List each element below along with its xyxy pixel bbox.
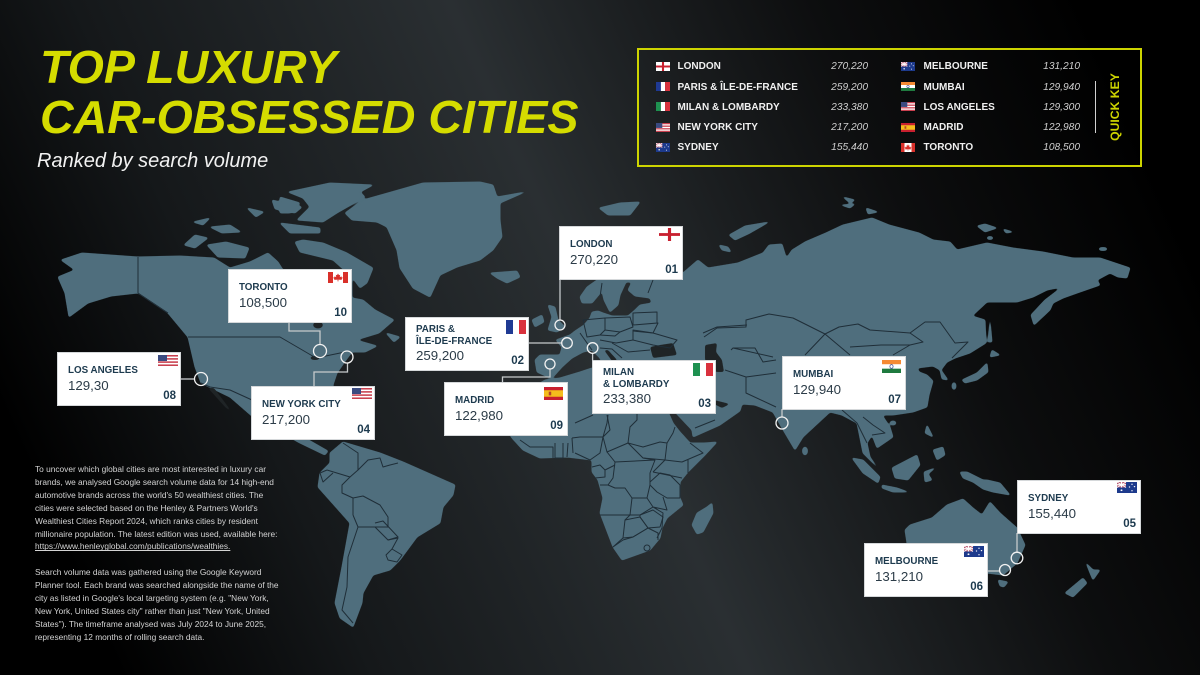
quick key rows: 122,980 — [1043, 122, 1080, 133]
card: Melbourne: 06 — [970, 581, 983, 593]
quick key rows: MUMBAI — [924, 82, 965, 92]
North America — [58, 253, 394, 455]
card: New York City: 217,200 — [262, 412, 310, 427]
panel: quick key — [637, 48, 1142, 167]
card: Los Angeles: 08 — [163, 390, 176, 402]
Africa — [500, 368, 717, 560]
card: Madrid: 122,980 — [455, 408, 503, 423]
Greenland — [345, 182, 525, 297]
Arctic islands of Canada — [184, 183, 400, 342]
Iceland — [490, 271, 520, 283]
card: Paris: 259,200 — [416, 348, 464, 363]
card: New York City: 04 — [357, 424, 370, 436]
card: Milan: 03 — [698, 398, 711, 410]
card: Mumbai — [782, 356, 906, 410]
card: London: 01 — [665, 264, 678, 276]
methodology text: cities were selected based on the Henley & Partners World's — [35, 503, 258, 513]
methodology text — [35, 464, 279, 642]
methodology text: States"). The timeframe analysed was July 2024 to June 2025, — [35, 619, 266, 629]
card: New York City — [251, 386, 375, 440]
card: London — [559, 226, 683, 280]
inland seas — [208, 322, 730, 412]
landmasses — [58, 182, 1130, 627]
methodology text: representing 12 months of rolling search data. — [35, 632, 204, 642]
methodology text: Search volume data was gathered using the Google Keyword — [35, 567, 261, 577]
Madagascar — [692, 503, 713, 534]
quick key rows: QUICK KEY — [1108, 73, 1122, 141]
methodology text: Planner tool. Each brand was searched alongside the name of the — [35, 580, 279, 590]
card: Sydney — [1017, 480, 1141, 534]
quick key rows: NEW YORK CITY — [678, 122, 758, 133]
methodology text: automotive brands across the world's 50 wealthiest cities. The — [35, 490, 263, 500]
card: Milan — [592, 360, 716, 414]
card: Toronto: 10 — [334, 307, 347, 319]
card: Toronto: TORONTO — [239, 282, 288, 293]
card: Milan: & LOMBARDY — [603, 379, 669, 390]
card: Milan: 233,380 — [603, 391, 651, 406]
quick key rows: MELBOURNE — [924, 61, 988, 72]
quick key rows: 129,940 — [1043, 82, 1080, 92]
methodology text: To uncover which global cities are most interested in luxury car — [35, 464, 266, 474]
methodology text: https://www.henleyglobal.com/publications/wealthies. — [35, 541, 230, 551]
card: Los Angeles: 129,30 — [68, 378, 109, 393]
Arctic islands of Eurasia — [599, 197, 1107, 252]
quick key rows — [656, 61, 1122, 153]
card: Toronto: 108,500 — [239, 295, 287, 310]
card: Sydney: 155,440 — [1028, 506, 1076, 521]
methodology text: Wealthiest Cities Report 2024, which ranks cities by resident — [35, 516, 258, 526]
quick key rows: 131,210 — [1043, 61, 1080, 72]
card: Toronto — [228, 269, 352, 323]
quick key rows: LOS ANGELES — [924, 102, 995, 113]
subtitle: Ranked by search volume — [37, 150, 268, 172]
card: Madrid — [444, 382, 568, 436]
title — [40, 41, 578, 143]
quick key rows: 129,300 — [1043, 102, 1080, 113]
quick key rows: 270,220 — [831, 61, 868, 72]
country borders — [138, 257, 968, 623]
quick key rows: TORONTO — [924, 142, 973, 153]
card: Paris: PARIS & — [416, 324, 455, 335]
card: Paris: 02 — [511, 355, 524, 367]
card: Mumbai: 129,940 — [793, 382, 841, 397]
quick key rows: 259,200 — [831, 82, 868, 92]
title: CAR-OBSESSED CITIES — [40, 91, 578, 143]
card: Melbourne: 131,210 — [875, 569, 923, 584]
card: Melbourne: MELBOURNE — [875, 556, 938, 567]
methodology text: millionaire population. The latest edition was used, available here: — [35, 529, 277, 539]
card: Los Angeles — [57, 352, 181, 406]
quick key rows: MADRID — [924, 122, 964, 133]
quick key rows: MILAN & LOMBARDY — [678, 102, 780, 113]
card: Sydney: 05 — [1123, 518, 1136, 530]
card: Sydney: SYDNEY — [1028, 493, 1068, 504]
Eurasia — [535, 218, 1130, 467]
quick key rows: SYDNEY — [678, 142, 719, 153]
card: Los Angeles: LOS ANGELES — [68, 365, 138, 376]
South America — [318, 442, 455, 627]
card: New York City: NEW YORK CITY — [262, 399, 341, 410]
methodology text: New York, United States city" rather than just "New York, United — [35, 606, 270, 616]
card: Milan: MILAN — [603, 367, 634, 378]
card: London: LONDON — [570, 239, 612, 250]
title: TOP LUXURY — [40, 41, 337, 93]
card: Mumbai: MUMBAI — [793, 369, 833, 380]
quick key rows: 155,440 — [831, 142, 868, 153]
methodology text: brands, we analysed Google search volume data for 14 high-end — [35, 477, 274, 487]
card: Paris — [405, 317, 529, 371]
card: London: 270,220 — [570, 252, 618, 267]
quick key rows: LONDON — [678, 61, 721, 72]
quick key rows: PARIS & ÎLE-DE-FRANCE — [678, 82, 798, 92]
Australia and New Zealand — [905, 499, 1100, 597]
East and Southeast Asian islands — [802, 320, 1010, 495]
quick key rows: 233,380 — [831, 102, 868, 113]
card: Madrid: MADRID — [455, 395, 494, 406]
British Isles — [548, 305, 565, 332]
quick key rows: 217,200 — [831, 122, 868, 133]
methodology text: city as listed in Google's local targeting system (e.g. "New York, — [35, 593, 269, 603]
card: Paris: ÎLE-DE-FRANCE — [416, 336, 492, 347]
card: Madrid: 09 — [550, 420, 563, 432]
quick key rows: 108,500 — [1043, 142, 1080, 153]
card: Mumbai: 07 — [888, 394, 901, 406]
card: Melbourne — [864, 543, 988, 597]
